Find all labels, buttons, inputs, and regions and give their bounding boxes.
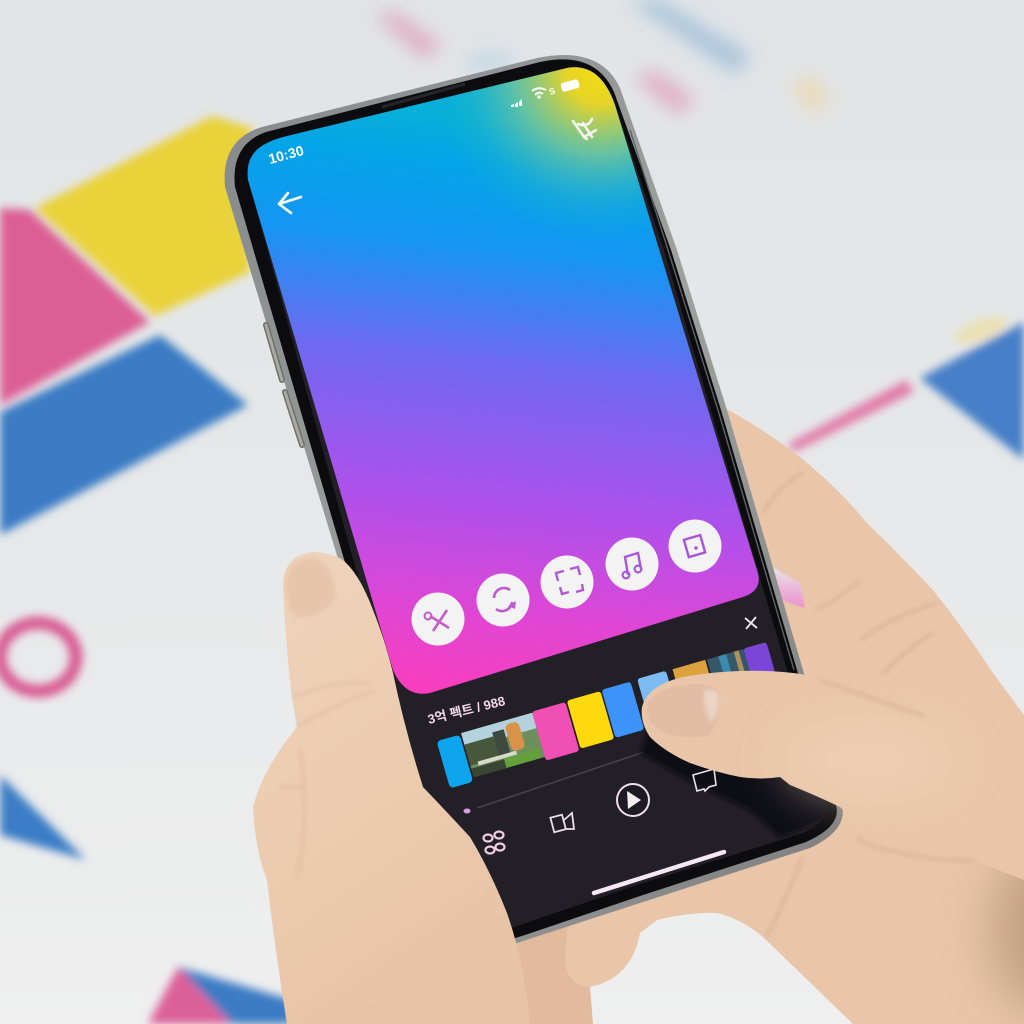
comment icon: [693, 769, 716, 791]
clip: blue: [437, 735, 473, 788]
blue triangle: [0, 775, 86, 860]
home indicator: [594, 852, 724, 893]
clip: blue 2: [602, 682, 644, 738]
pink shape: [0, 208, 150, 405]
clip: pink: [532, 702, 579, 761]
status icons: [511, 79, 580, 107]
thumbnail lunula: [704, 690, 719, 722]
close icon: [745, 617, 757, 629]
yellow shape: [35, 116, 252, 316]
button: crop frame: [540, 556, 594, 608]
button: music note: [606, 538, 658, 590]
dark screen panel: [248, 67, 826, 945]
background sliver between fingers: [772, 567, 805, 608]
status icons: S: [548, 86, 556, 97]
blue shape: [0, 335, 248, 535]
right thumb over screen: [642, 671, 1024, 880]
faded pink dash 2: [635, 70, 696, 115]
button: scissors: [412, 592, 464, 646]
right pink stripe: [788, 380, 914, 452]
clip: teal photo: [707, 649, 752, 688]
phone frame: [225, 55, 843, 960]
clip: yellow: [567, 691, 614, 749]
clip: orange photo: [673, 660, 713, 698]
thumbnail: [647, 684, 720, 737]
right blue triangle: [920, 322, 1024, 460]
clip: light blue: [637, 671, 677, 717]
button: rotate: [476, 574, 530, 626]
faded blue blob: [464, 54, 516, 70]
faded blue dash: [628, 0, 752, 75]
clip count label: 3억 펙트 / 988: [426, 693, 507, 727]
thumb creases to palm: [820, 680, 975, 860]
play button: [617, 784, 649, 816]
top faded shapes: [375, 0, 832, 115]
finger base under phone: [510, 890, 640, 1024]
speaker icon: [550, 813, 574, 832]
cart icon: [573, 119, 596, 139]
left hand creases: [280, 683, 375, 880]
pink ring: [0, 623, 76, 691]
thumb highlight: [785, 722, 955, 798]
timeline clips strip: [437, 642, 775, 788]
apps icon: [484, 832, 504, 854]
faded pink dash: [375, 12, 442, 60]
back arrow: [279, 193, 301, 213]
gradient video preview: [248, 67, 759, 694]
black bezel: [235, 59, 837, 955]
phone: [225, 55, 843, 960]
thumbnail: [286, 558, 335, 617]
left hand: [253, 552, 530, 1024]
bottom blue shape: [178, 967, 292, 1024]
thumb shadow on screen: [638, 732, 826, 838]
clip: purple: [743, 642, 775, 679]
palm shadow: [990, 845, 1024, 1015]
right yellow blob: [950, 311, 1010, 349]
status bar time: 10:30: [267, 142, 306, 167]
knuckle folds: [763, 472, 937, 937]
bezel highlight line: [630, 130, 794, 670]
bottom pink triangle: [148, 967, 232, 1024]
progress track: [464, 744, 668, 814]
clip: photo: [461, 713, 545, 777]
right hand behind phone: [510, 408, 1024, 1024]
button: media square: [668, 520, 722, 572]
tool buttons row: [412, 520, 722, 646]
speaker slit: [382, 84, 465, 107]
faded peach dash: [790, 75, 832, 115]
side buttons: [266, 325, 302, 445]
